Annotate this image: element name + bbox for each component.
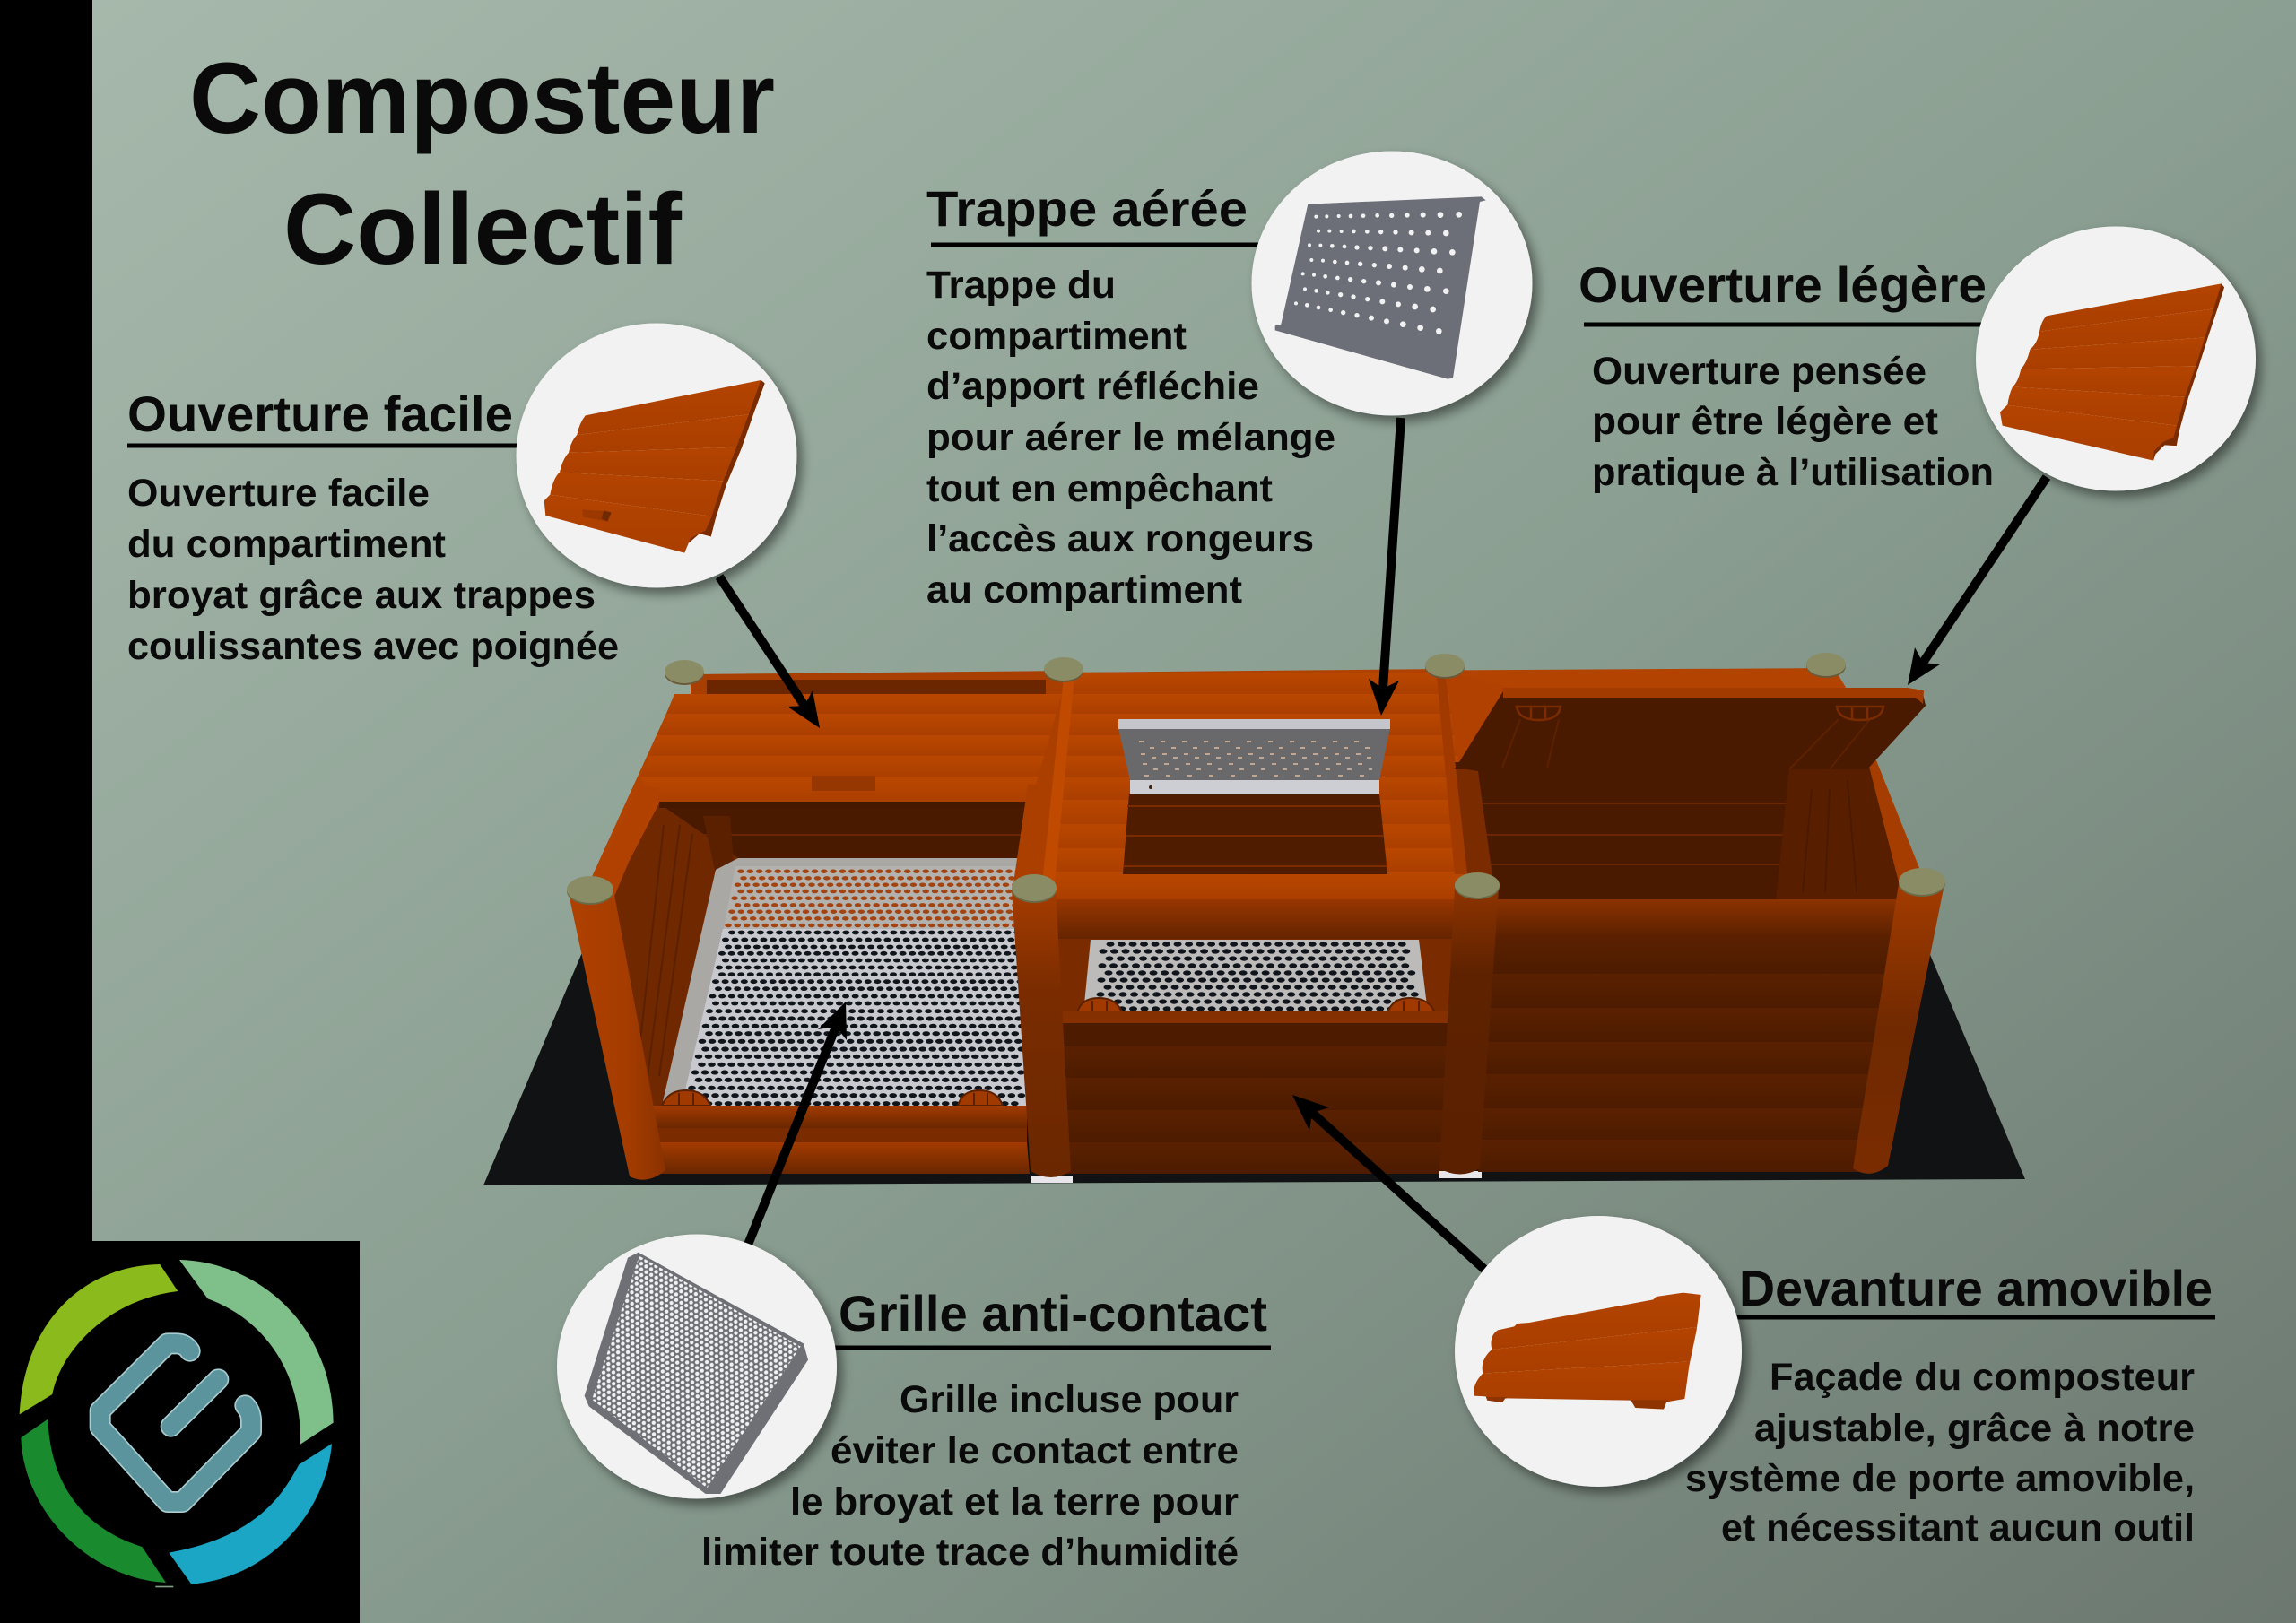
right post (1853, 884, 1944, 1174)
middle deck (1040, 669, 1489, 899)
arrow: grille anti-contact (748, 1002, 847, 1245)
mid-right post (1439, 888, 1499, 1175)
icon circle: mesh grid (557, 1234, 837, 1499)
description (926, 264, 1335, 612)
left compartment front wall (637, 1106, 1030, 1174)
black left band (0, 0, 92, 1623)
arrow: ouverture légère (1908, 477, 2047, 685)
description: limiter toute trace d’humidité (701, 1531, 1239, 1574)
icon circle: removable front panel (1455, 1216, 1742, 1487)
logo panel (0, 1241, 360, 1623)
description (701, 1378, 1239, 1574)
description: Grille incluse pour (900, 1378, 1239, 1421)
description: le broyat et la terre pour (790, 1480, 1239, 1523)
description (127, 472, 619, 668)
heading: Grille anti-contact (839, 1285, 1267, 1341)
description: du compartiment (127, 523, 446, 566)
right compartment interior (1437, 676, 1919, 904)
raised perforated hatch (1118, 719, 1390, 794)
title: Composteur (189, 42, 775, 154)
left lid with handle (659, 694, 1062, 808)
left compartment interior (610, 803, 1031, 1106)
left post (568, 890, 665, 1180)
description: coulissantes avec poignée (127, 625, 619, 668)
composter 3D illustration (567, 653, 1945, 1183)
icon circle: orange sliding panel (517, 323, 796, 588)
side rolls left compartment (592, 785, 1049, 898)
description: pratique à l’utilisation (1592, 451, 1994, 494)
filler between deck and right lid (1440, 671, 1516, 901)
grille clips left (662, 1090, 1003, 1106)
description: Ouverture pensée (1592, 350, 1926, 393)
description: compartiment (926, 315, 1187, 358)
description: d’apport réfléchie (926, 365, 1259, 408)
callout: devanture amovible (1455, 1216, 2215, 1549)
mid-left post (1012, 890, 1071, 1177)
callout: ouverture facile (127, 323, 796, 668)
title: Collectif (283, 173, 683, 285)
white feet (1031, 1171, 1482, 1183)
description: Façade du composteur (1770, 1356, 2195, 1399)
description: au compartiment (926, 568, 1242, 612)
grille left compartment (662, 858, 1027, 1106)
open lid (1455, 688, 1926, 769)
description: ajustable, grâce à notre (1754, 1407, 2195, 1450)
arrow: devanture amovible (1292, 1095, 1489, 1273)
heading: Ouverture facile (127, 386, 513, 442)
callout: ouverture légère (1578, 226, 2256, 494)
callout: trappe aérée (926, 151, 1532, 612)
middle compartment window (1054, 939, 1468, 1015)
filler between left lid and deck (1013, 690, 1072, 899)
callout: grille anti-contact (557, 1234, 1271, 1574)
arrow: ouverture facile (719, 577, 820, 728)
heading: Ouverture légère (1578, 256, 1987, 313)
description: système de porte amovible, (1685, 1457, 2195, 1500)
middle front beam (1049, 899, 1471, 939)
description: Ouverture facile (127, 472, 430, 515)
logo mark (20, 1260, 334, 1587)
heading: Trappe aérée (926, 180, 1248, 237)
description (1685, 1356, 2195, 1549)
description: l’accès aux rongeurs (926, 517, 1314, 560)
post caps (567, 653, 1945, 905)
description (1592, 350, 1994, 494)
black base under composter (483, 950, 2025, 1185)
description: broyat grâce aux trappes (127, 574, 596, 617)
description: pour aérer le mélange (926, 416, 1335, 459)
icon circle: perforated plate (1252, 151, 1532, 416)
description: éviter le contact entre (831, 1429, 1239, 1472)
left side rail (590, 696, 674, 898)
description: et nécessitant aucun outil (1721, 1506, 2195, 1549)
right front wall (1471, 899, 1910, 1172)
description: Trappe du (926, 264, 1116, 307)
description: pour être légère et (1592, 400, 1938, 443)
open hatch hole (1123, 794, 1387, 874)
title (189, 42, 775, 285)
heading: Devanture amovible (1739, 1260, 2213, 1316)
description: tout en empêchant (926, 467, 1273, 510)
middle removable front (1049, 1011, 1460, 1174)
arrow: trappe aérée (1369, 418, 1401, 716)
icon circle: orange lid panel (1976, 226, 2256, 491)
back rails (691, 668, 1848, 698)
